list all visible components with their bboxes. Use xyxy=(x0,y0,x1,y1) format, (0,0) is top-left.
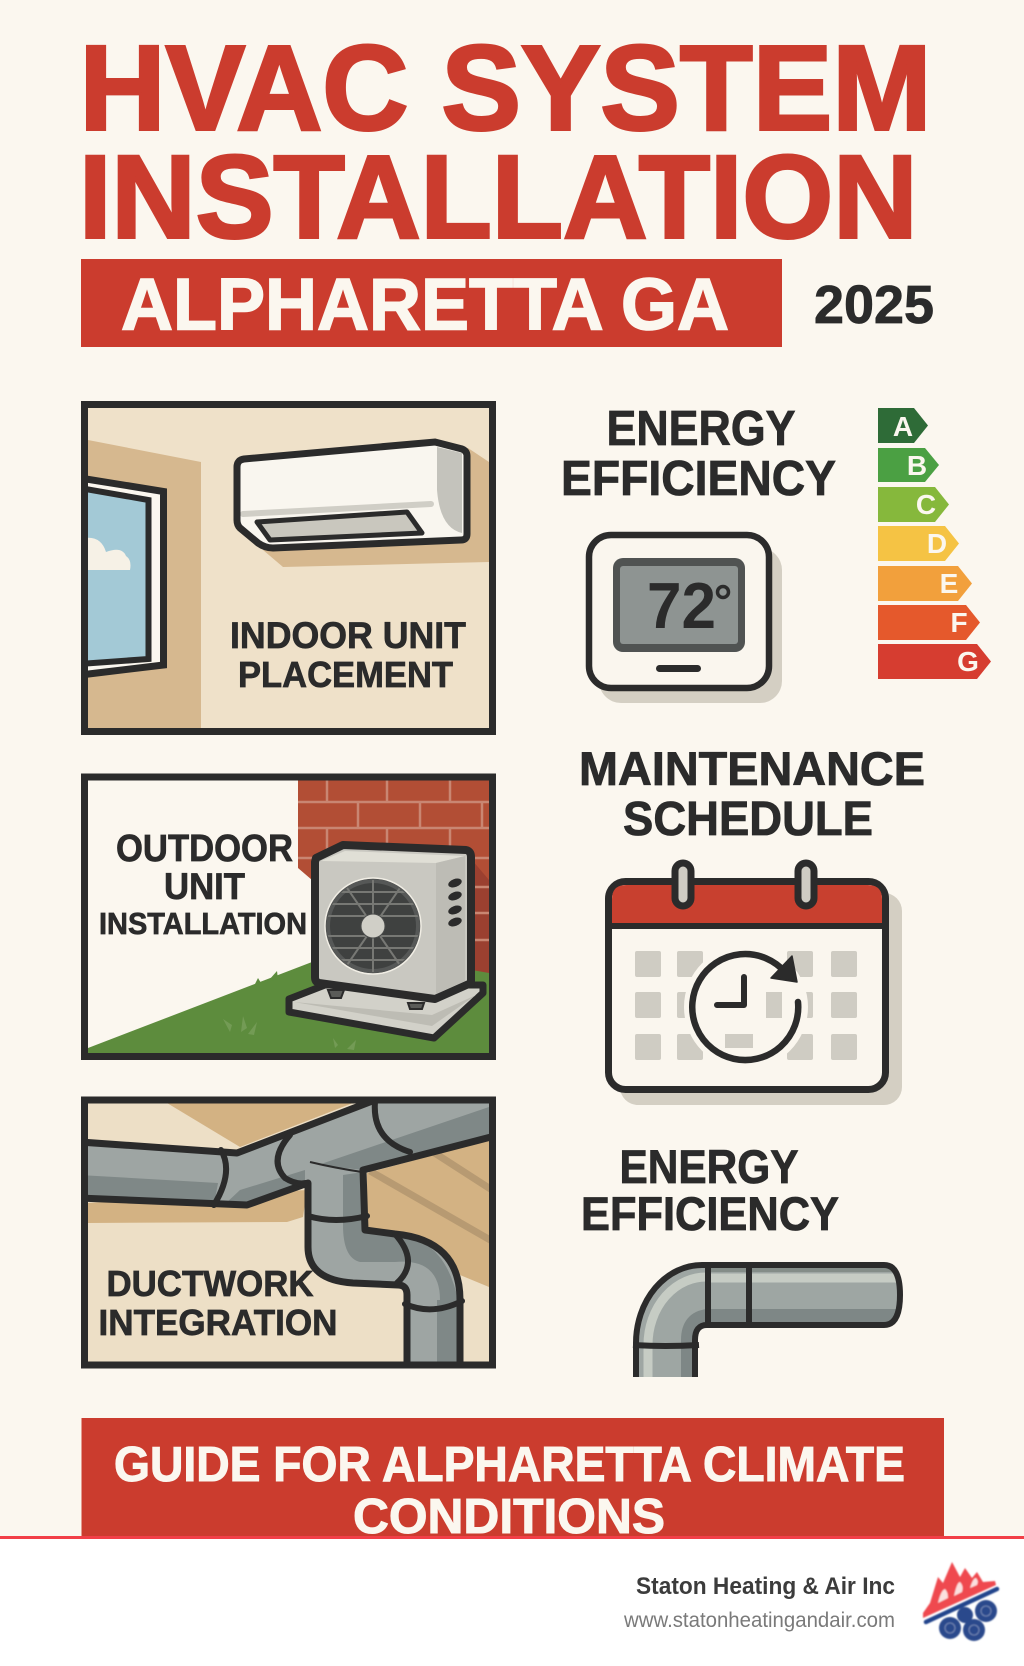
grass xyxy=(88,962,489,1053)
label: outdoor unit installation: OUTDOOR xyxy=(116,828,293,870)
heading: energy efficiency (second) xyxy=(581,1140,839,1240)
banner: guide for Alpharetta climate conditions: CONDITIONS xyxy=(353,1490,665,1544)
title: HVAC System Installation: HVAC SYSTEM xyxy=(80,20,932,156)
label: outdoor unit installation: UNIT xyxy=(164,866,245,907)
title: HVAC System Installation: INSTALLATION xyxy=(79,132,918,264)
icon: thermostat 72 degrees: 72 xyxy=(647,569,716,642)
heading: energy efficiency: ENERGY xyxy=(606,402,796,456)
chart: energy rating arrows A to G: F xyxy=(950,607,968,638)
year: 2025: 2025 xyxy=(814,275,934,335)
footer: company name and website: www.statonheatingandair.com xyxy=(623,1609,895,1632)
icon: company logo flame and snowflakes xyxy=(923,1562,997,1641)
icon: window xyxy=(80,478,164,675)
icon: indoor AC unit xyxy=(237,442,467,548)
heading: energy efficiency (second): ENERGY xyxy=(620,1140,798,1193)
label: outdoor unit installation: INSTALLATION xyxy=(99,906,307,941)
icon: maintenance calendar with clock xyxy=(608,863,902,1105)
label: ductwork integration: DUCTWORK xyxy=(106,1263,314,1304)
chart: energy rating arrows A to G: E xyxy=(940,568,958,599)
icon: concrete base xyxy=(289,985,483,1038)
banner: Alpharetta GA: ALPHARETTA GA xyxy=(121,264,729,346)
heading: energy efficiency: EFFICIENCY xyxy=(561,452,836,506)
footer: company name and website xyxy=(623,1573,895,1632)
icon: duct assembly xyxy=(80,1100,495,1370)
icon: thermostat 72 degrees xyxy=(589,535,782,703)
chart: energy rating arrows A to G: C xyxy=(916,489,936,520)
label: ductwork integration xyxy=(98,1263,338,1343)
brick wall xyxy=(298,780,489,980)
chart: energy rating arrows A to G: D xyxy=(927,528,947,559)
panel: outdoor unit installation xyxy=(84,777,492,1056)
panel: ductwork integration xyxy=(80,1100,495,1370)
chart: energy rating arrows A to G: A xyxy=(893,411,913,442)
label: indoor unit placement: INDOOR UNIT xyxy=(230,615,466,656)
label: outdoor unit installation xyxy=(99,828,307,941)
chart: energy rating arrows A to G: B xyxy=(907,450,927,481)
heading: energy efficiency (second): EFFICIENCY xyxy=(581,1187,839,1240)
heading: maintenance schedule: SCHEDULE xyxy=(623,793,873,846)
heading: energy efficiency xyxy=(561,402,836,506)
heading: maintenance schedule: MAINTENANCE xyxy=(579,742,925,795)
chart: energy rating arrows A to G: G xyxy=(957,646,979,677)
icon: outdoor condenser unit xyxy=(315,845,471,1009)
chart: energy rating arrows A to G xyxy=(878,408,991,679)
label: indoor unit placement: PLACEMENT xyxy=(238,654,453,695)
label: indoor unit placement xyxy=(230,615,466,695)
footer: company name and website: Staton Heating & Air Inc xyxy=(636,1573,895,1600)
heading: maintenance schedule xyxy=(579,742,925,846)
label: ductwork integration: INTEGRATION xyxy=(98,1302,338,1343)
banner: guide for Alpharetta climate conditions xyxy=(82,1418,944,1544)
icon: duct elbow pipe xyxy=(633,1264,900,1377)
title: HVAC System Installation xyxy=(79,20,932,264)
panel: indoor unit placement xyxy=(80,404,492,732)
banner: guide for Alpharetta climate conditions: GUIDE FOR ALPHARETTA CLIMATE xyxy=(114,1438,905,1492)
footer bar xyxy=(0,1536,1024,1666)
